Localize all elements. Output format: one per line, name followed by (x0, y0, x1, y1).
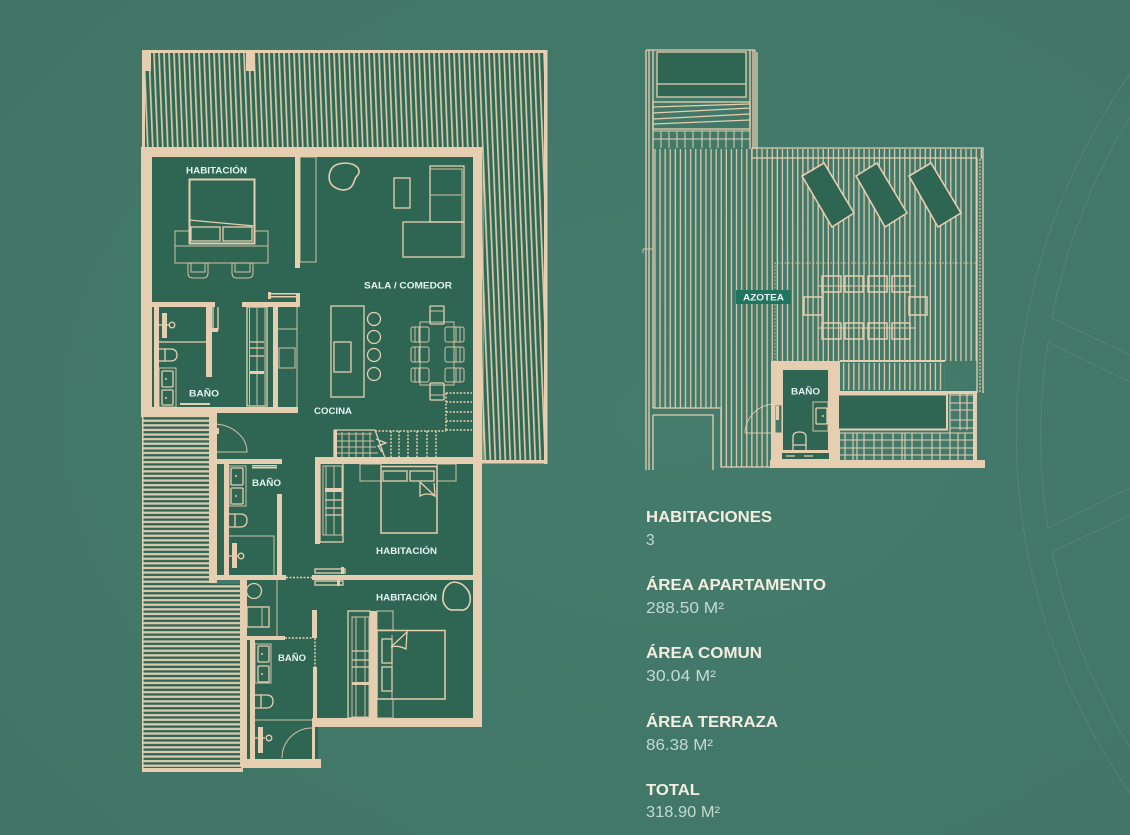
dining table and chairs (411, 306, 464, 400)
label: baño azotea: BAÑO (791, 386, 820, 398)
sun lounger 1 (802, 163, 854, 227)
stat: habitaciones: HABITACIONES (646, 509, 772, 526)
stat: habitaciones (646, 509, 772, 549)
label: cocina: COCINA (314, 406, 352, 417)
label: habitación 3: HABITACIÓN (376, 592, 437, 604)
upper planter (657, 52, 746, 97)
rooftop service area walls (770, 360, 985, 468)
stat: área terraza: ÁREA TERRAZA (646, 714, 778, 731)
rooftop planter (838, 394, 947, 430)
unit data list (646, 509, 826, 821)
rooftop bathroom door (745, 404, 775, 433)
apartment interior floor (141, 147, 482, 767)
powder room fixtures (246, 584, 269, 627)
staircase (334, 393, 472, 459)
label: baño 3: BAÑO (278, 653, 306, 664)
label: habitación: HABITACIÓN (186, 164, 247, 176)
kitchen island and stools (331, 306, 380, 397)
plant: living room (329, 163, 359, 190)
floor plan: rooftop level (643, 50, 985, 470)
deck: left side decking (142, 416, 243, 772)
stat: área terraza (646, 714, 778, 754)
stat: área apartamento: ÁREA APARTAMENTO (646, 577, 826, 594)
upper grid (653, 131, 750, 148)
entry door (213, 424, 247, 452)
stat: área comun: 30.04 M² (646, 668, 716, 685)
sun lounger 2 (856, 163, 907, 227)
bedroom 3 wardrobe (348, 611, 370, 718)
label: habitación 2: HABITACIÓN (376, 545, 437, 557)
rooftop lower grid (838, 430, 974, 460)
rooftop bathroom (771, 361, 840, 468)
stat: total: 318.90 M² (646, 804, 720, 821)
stat: área comun: ÁREA COMUN (646, 645, 762, 662)
label: baño 2: BAÑO (252, 478, 281, 489)
sun lounger 3 (909, 163, 961, 227)
bathroom 2 fixtures (228, 465, 277, 575)
exterior and structural walls (141, 147, 483, 768)
stat: total (646, 782, 720, 821)
bedroom 2 bed (360, 464, 456, 533)
stat: área apartamento (646, 577, 826, 617)
floor plan: main apartment level (141, 50, 548, 772)
label: azotea tag: AZOTEA (743, 292, 784, 304)
rooftop dining table and chairs (804, 276, 927, 339)
label: baño 1: BAÑO (189, 388, 219, 400)
stat: área terraza: 86.38 M² (646, 737, 713, 754)
rooftop side grid (950, 394, 973, 430)
living room closet (300, 157, 316, 262)
terrace: upper and right decking (142, 50, 548, 464)
plant: bedroom 3 (443, 582, 470, 610)
stat: habitaciones: 3 (646, 532, 655, 549)
stat: área apartamento: 288.50 M² (646, 600, 724, 617)
label: sala / comedor: SALA / COMEDOR (364, 280, 452, 292)
rooftop striped deck (643, 50, 983, 470)
stat: total: TOTAL (646, 782, 700, 799)
master bedroom furniture (175, 180, 268, 278)
bedroom 2 wardrobe (320, 463, 343, 542)
bedroom 3 bed (377, 611, 445, 718)
dashed pergola outline (775, 263, 977, 362)
background emblem arcs (1016, 74, 1130, 793)
stat: área comun (646, 645, 762, 685)
sliding doors between bedrooms (315, 567, 345, 586)
walk-in closet and kitchen counter (247, 292, 298, 407)
upper slats (653, 102, 750, 129)
living room sofa and table (394, 166, 464, 257)
master bathroom fixtures (158, 307, 218, 407)
bathroom 3 fixtures (254, 644, 312, 758)
label: azotea tag (736, 290, 791, 304)
